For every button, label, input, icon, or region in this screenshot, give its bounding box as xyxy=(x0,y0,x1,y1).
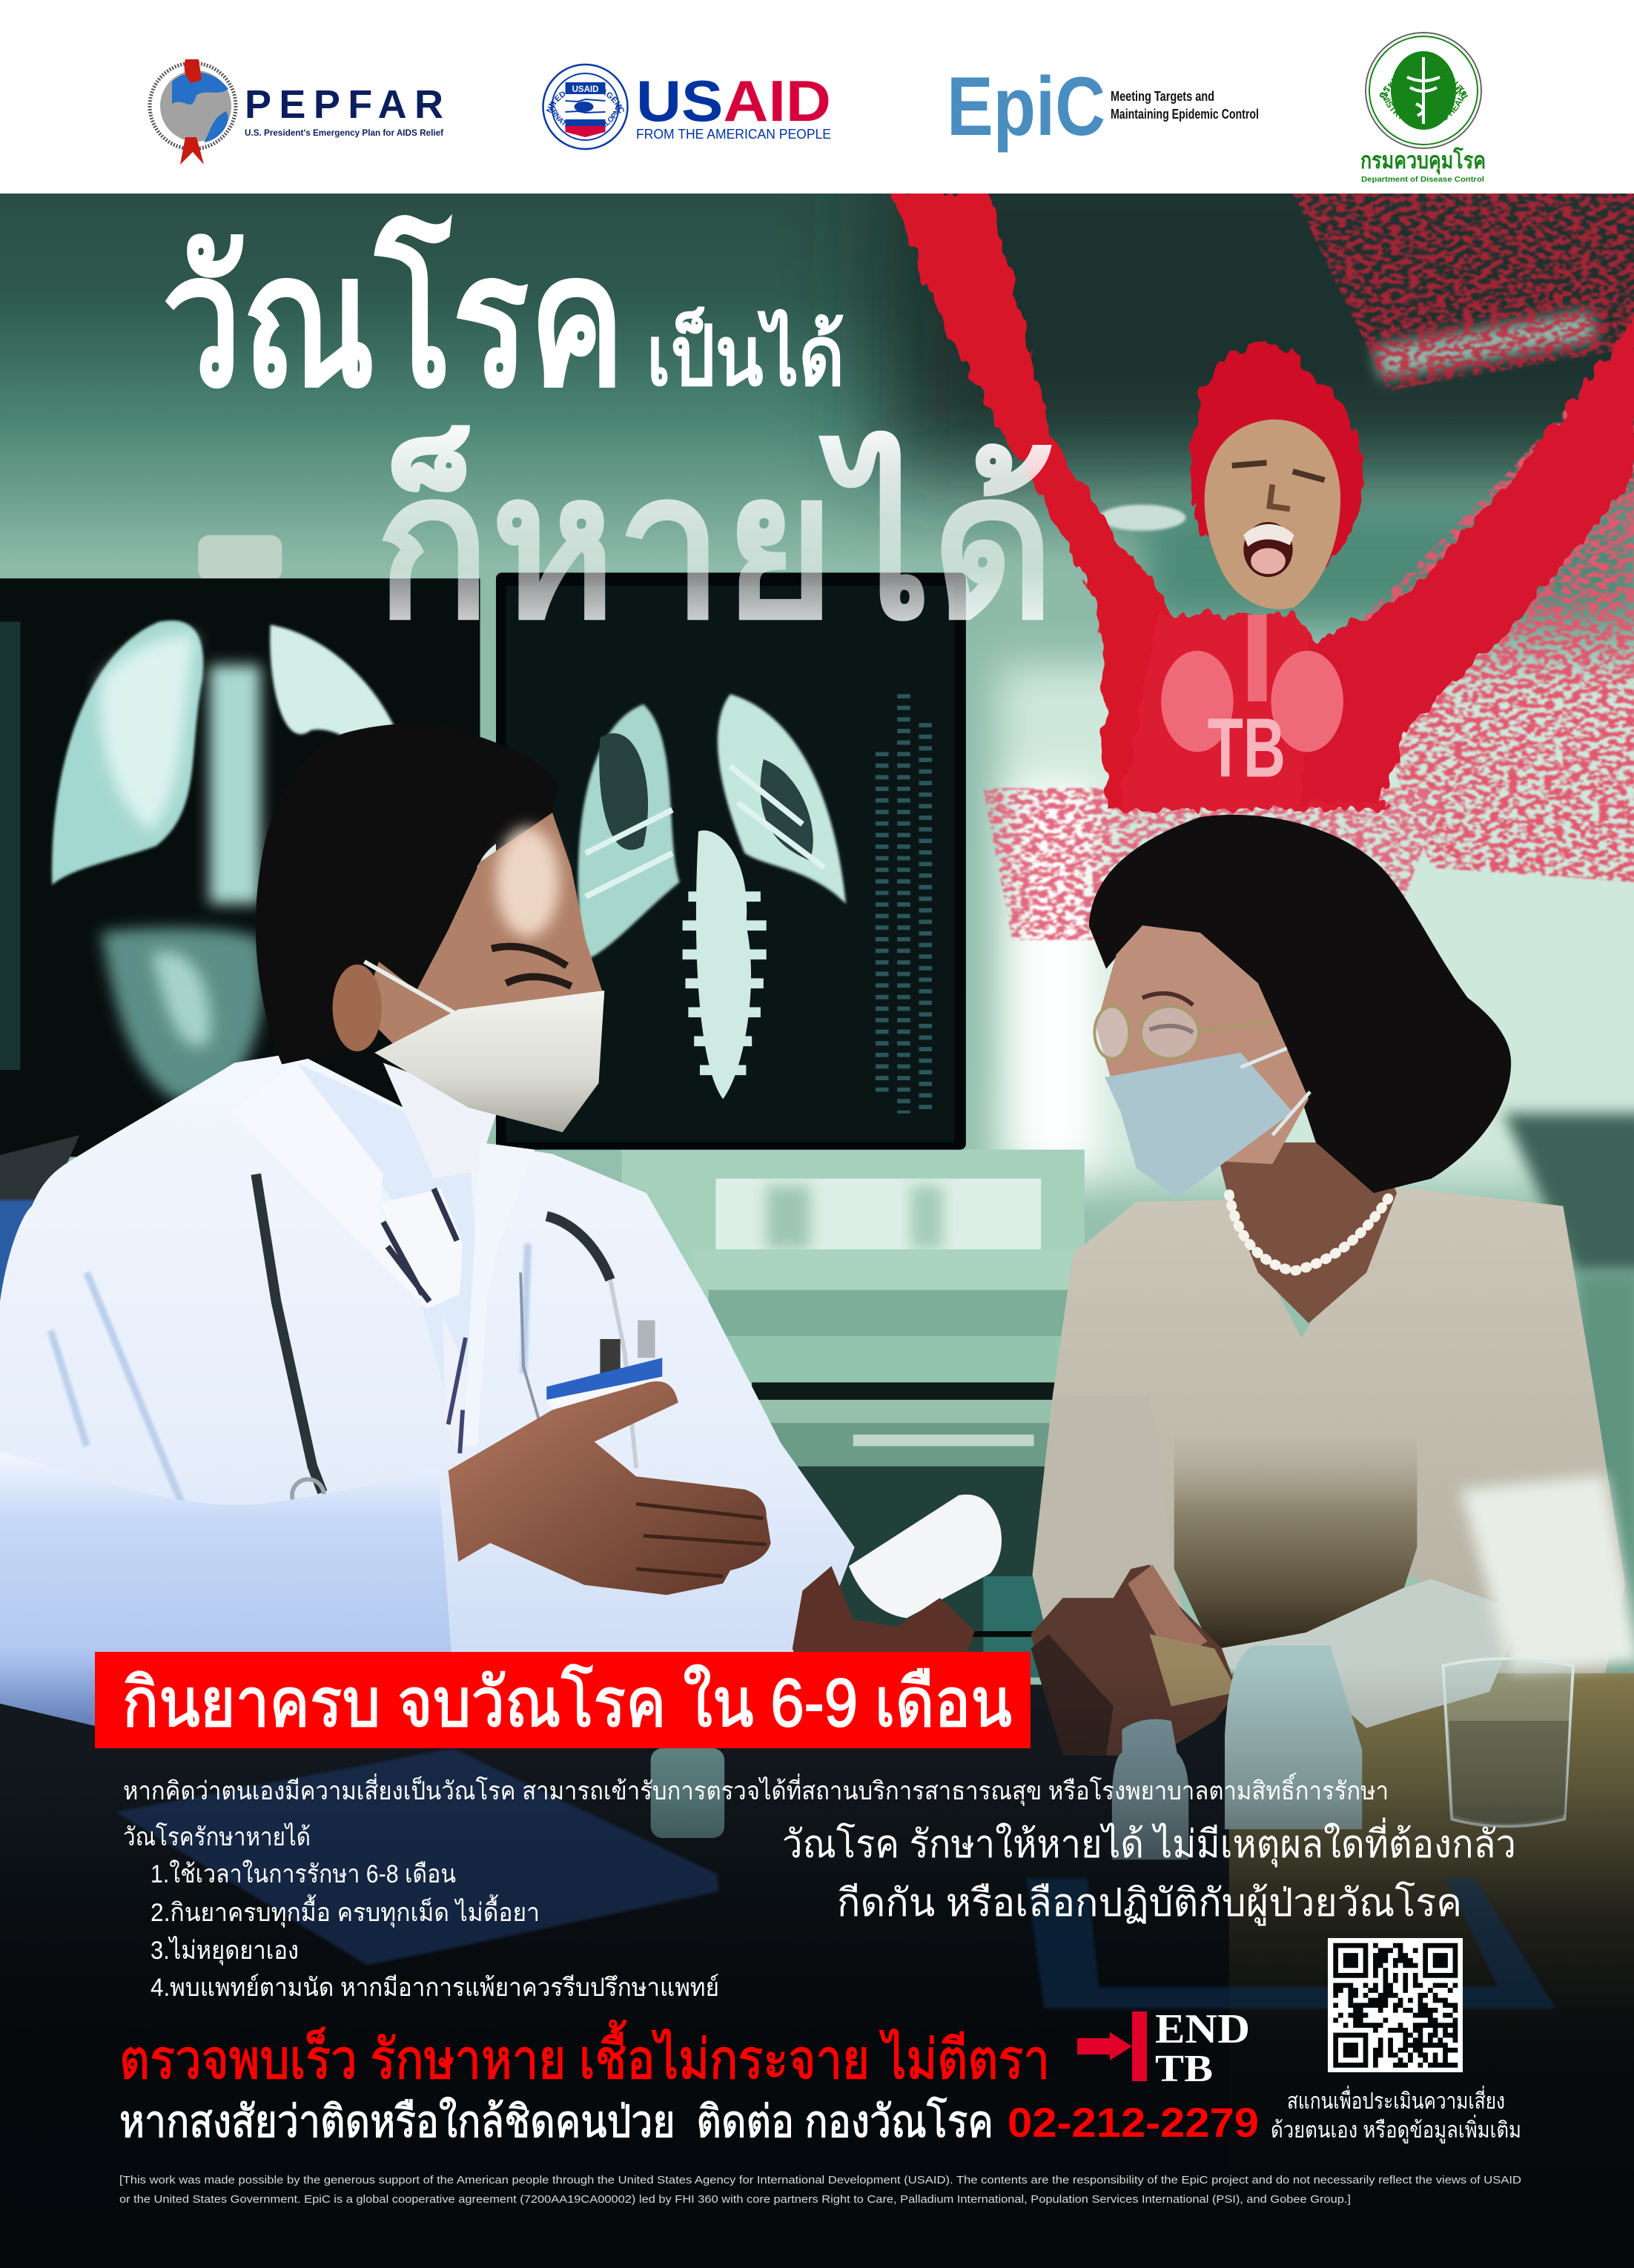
glasses xyxy=(1094,1006,1272,1059)
header band xyxy=(0,32,1634,194)
slogan: ตรวจพบเร็ว รักษาหาย เชื้อไม่กระจาย ไม่ตีตรา xyxy=(119,2020,1050,2090)
fading spray below body xyxy=(983,788,1446,940)
hand holding bottle xyxy=(793,1566,975,1656)
USAID seal: INTERNATIONAL DEVELOPMENT xyxy=(549,102,622,128)
right lapel xyxy=(463,1143,535,1446)
gesturing hand xyxy=(449,1381,771,1595)
arrow xyxy=(1077,2032,1132,2060)
patient xyxy=(1031,815,1634,1756)
TB chest letters: TB xyxy=(1208,701,1286,794)
brow and eye xyxy=(1142,994,1193,1033)
mask strap right xyxy=(1240,1048,1310,1135)
PEPFAR subtitle: U.S. President's Emergency Plan for AIDS Relief xyxy=(245,128,444,138)
mask strap xyxy=(365,962,458,1015)
shelf and equipment under monitor xyxy=(622,1150,1085,1677)
fading spray on the right xyxy=(1345,333,1634,882)
doctor xyxy=(0,724,1002,1728)
small bottle on monitor xyxy=(198,535,282,581)
USAID tagline: FROM THE AMERICAN PEOPLE xyxy=(636,127,831,142)
title line 1 small: เป็นได้ xyxy=(646,306,844,403)
item 4: 4.พบแพทย์ตามนัด หากมีอาการแพ้ยาควรรีบปรึกษาแพทย์ xyxy=(150,1974,719,2002)
neck xyxy=(383,1063,499,1179)
stethoscope xyxy=(256,1174,636,1511)
caption line 1: สแกนเพื่อประเมินความเสี่ยง xyxy=(1287,2086,1505,2114)
END TB letters: END xyxy=(1155,2006,1250,2052)
face mask xyxy=(1105,1053,1293,1197)
left sleeve xyxy=(1033,1395,1185,1642)
END TB logo xyxy=(1077,2006,1250,2090)
hotline prompt: หากสงสัยว่าติดหรือใกล้ชิดคนป่วย ติดต่อ กองวัณโรค xyxy=(119,2096,993,2146)
hair xyxy=(1089,815,1511,1193)
red banner xyxy=(95,1652,1031,1748)
lit upper arm xyxy=(1461,1475,1634,1673)
left arm xyxy=(889,192,1231,810)
chair xyxy=(0,1135,79,1229)
pocket pens and badge xyxy=(546,1320,665,1417)
seal: MINISTRY OF PUBLIC HEALTH xyxy=(1381,90,1465,122)
USAID seal: USAID xyxy=(572,85,598,94)
anti-stigma message xyxy=(782,1817,1516,1926)
logo: Ministry of Public Health xyxy=(1360,32,1486,184)
message line 1: วัณโรค รักษาให้หายได้ ไม่มีเหตุผลใดที่ต้องกลัว xyxy=(782,1817,1516,1868)
bottom darkening xyxy=(0,1663,1634,2268)
dark ceiling on right xyxy=(882,130,1634,463)
QR code xyxy=(1328,1938,1463,2072)
ceiling light streak xyxy=(1374,311,1598,379)
hood xyxy=(1190,341,1364,569)
caption line 2: ด้วยตนเอง หรือดูข้อมูลเพิ่มเติม xyxy=(1271,2115,1521,2143)
QR caption xyxy=(1271,2086,1521,2143)
disclaimer xyxy=(119,2174,1521,2206)
pearl necklace xyxy=(1229,1191,1392,1271)
TB germ mascot xyxy=(889,192,1634,940)
sweater belly shade xyxy=(1174,1432,1417,1650)
EpiC tagline: Meeting Targets and xyxy=(1111,89,1214,104)
shirt xyxy=(297,1063,480,1446)
department name English: Department of Disease Control xyxy=(1361,175,1484,184)
disclaimer line 2: or the United States Government. EpiC is a global cooperative agreement (7200AA19CA00002) led by FHI 360 with core partners Right to Care, Palladium International, Population Services International (PSI), and Gobee Group.] xyxy=(119,2193,1351,2206)
disclaimer line 1: [This work was made possible by the generous support of the American people through the United States Agency for International Development (USAID). The contents are the responsibility of the EpiC project and do not necessarily reflect the views of USAID xyxy=(119,2174,1521,2186)
item 1: 1.ใช้เวลาในการรักษา 6-8 เดือน xyxy=(150,1859,456,1888)
seal xyxy=(1365,32,1482,149)
chest lungs xyxy=(1161,615,1343,752)
logo: PEPFAR xyxy=(150,59,444,165)
title line 1: วัณโรค xyxy=(162,214,625,424)
seal: กระทรวงสาธารณสุข xyxy=(1379,78,1468,99)
left x-ray monitor xyxy=(0,578,480,1157)
centre x-ray monitor xyxy=(496,572,966,1150)
contact line xyxy=(119,2096,1259,2146)
speckle top right xyxy=(1293,192,1634,391)
tie xyxy=(380,1188,469,1453)
blue tray in shadow xyxy=(1027,1879,1556,2009)
clasped hands xyxy=(1031,1564,1238,1756)
table items xyxy=(651,1646,1573,1859)
mascot face xyxy=(1205,420,1340,609)
intro sentence: หากคิดว่าตนเองมีความเสี่ยงเป็นวัณโรค สามารถเข้ารับการตรวจได้ที่สถานบริการสาธารณสุข หรือโรงพยาบาลตามสิทธิ์การรักษา xyxy=(123,1772,1389,1806)
USAID seal xyxy=(542,64,629,150)
right arm xyxy=(1301,317,1634,802)
dim lamp shapes xyxy=(1099,505,1185,531)
USAID wordmark: USAID xyxy=(636,68,831,133)
PEPFAR wordmark: PEPFAR xyxy=(245,82,443,127)
item 2: 2.กินยาครบทุกมื้อ ครบทุกเม็ด ไม่ดื้อยา xyxy=(150,1894,540,1928)
forehead highlight xyxy=(496,827,560,937)
surgical mask xyxy=(374,991,604,1132)
logo: USAID xyxy=(542,64,831,150)
dark table left side xyxy=(0,1685,1237,2268)
blue chair mesh xyxy=(0,1200,50,1345)
USAID seal: UNITED STATES AGENCY xyxy=(546,89,624,113)
sleeve xyxy=(0,1452,452,1728)
coat shade lines xyxy=(50,1243,528,1518)
mascot body xyxy=(889,192,1634,810)
list heading: วัณโรครักษาหายได้ xyxy=(123,1822,311,1851)
face xyxy=(1096,925,1309,1164)
table right side xyxy=(1229,1673,1634,2268)
sweater xyxy=(1033,1187,1625,1673)
teal band behind mascot xyxy=(1142,506,1634,622)
message line 2: กีดกัน หรือเลือกปฏิบัติกับผู้ป่วยวัณโรค xyxy=(837,1881,1462,1926)
title line 2: ก็หายได้ xyxy=(375,423,1055,661)
ear xyxy=(333,965,382,1051)
item 3: 3.ไม่หยุดยาเอง xyxy=(150,1936,299,1966)
treatment list xyxy=(123,1822,719,2002)
bright window area on right xyxy=(998,665,1634,1186)
hair xyxy=(256,724,558,1064)
red bar xyxy=(1132,2011,1147,2081)
logo: EpiC: Maintaining Epidemic Control xyxy=(1111,107,1259,122)
teal wall right lower xyxy=(1576,1272,1634,1677)
right forearm xyxy=(1211,1579,1515,1728)
white coat xyxy=(0,1053,855,1728)
left lapel xyxy=(230,1063,426,1309)
face xyxy=(362,813,604,1099)
banner text: กินยาครบ จบวัณโรค ใน 6-9 เดือน xyxy=(122,1664,1012,1741)
pill bottle xyxy=(849,1495,1002,1618)
light gap between monitors xyxy=(477,767,496,940)
dark wall behind patient on right xyxy=(1504,1114,1634,1272)
clipboard in shadow xyxy=(116,1748,718,1966)
white glare strip xyxy=(1012,781,1099,1171)
logo: EpiC xyxy=(947,60,1259,153)
globe seal xyxy=(150,59,236,165)
eye and brow xyxy=(492,947,571,986)
torso xyxy=(1121,615,1388,810)
title xyxy=(162,214,1055,661)
EpiC wordmark: EpiC xyxy=(947,60,1105,153)
neck and chest xyxy=(1214,1143,1397,1323)
END TB logo: TB xyxy=(1155,2048,1213,2090)
department name Thai: กรมควบคุมโรค xyxy=(1360,147,1486,175)
phone number: 02-212-2279 xyxy=(1008,2099,1259,2146)
